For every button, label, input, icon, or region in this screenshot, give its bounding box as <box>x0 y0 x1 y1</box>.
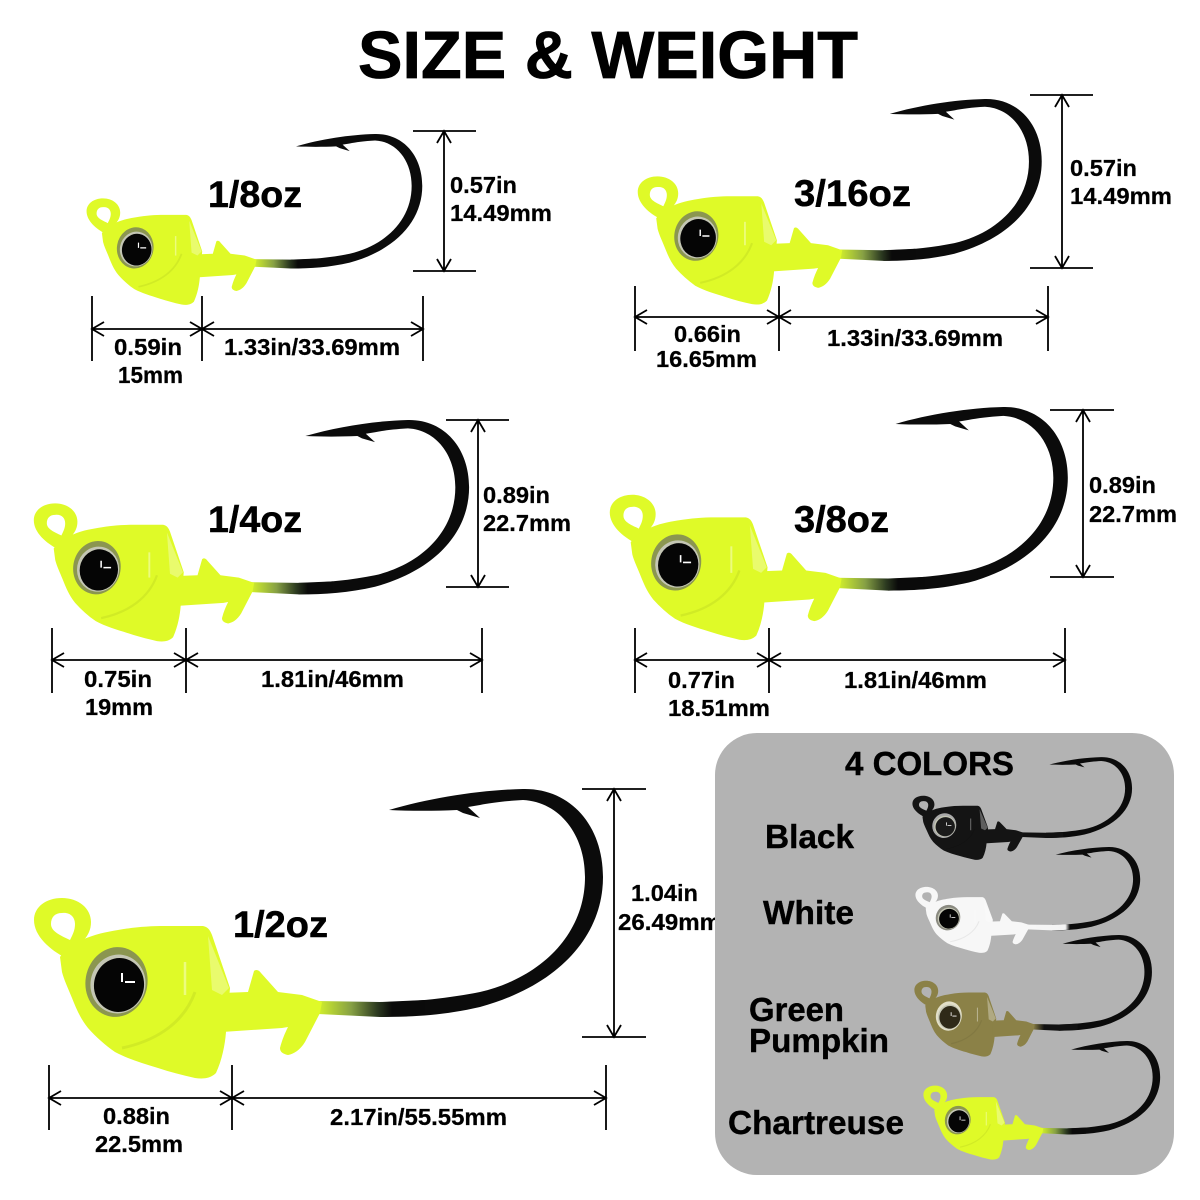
label: hook gap: 22.7mm <box>483 510 571 536</box>
dimension: head and shank length <box>635 628 1065 693</box>
jig: 1/2oz <box>34 789 603 1078</box>
panel: 3/16oz jig with dimensions <box>635 95 1172 372</box>
dimension: head and shank length <box>52 628 482 693</box>
weight label 1/8oz: 1/8oz <box>208 173 302 215</box>
weight label 3/8oz: 3/8oz <box>794 498 889 540</box>
label: hook gap: 0.89in <box>483 482 550 508</box>
heading: 4 colors: 4 COLORS <box>845 745 1014 782</box>
label: green pumpkin: Green <box>749 991 844 1028</box>
panel: 3/8oz jig with dimensions <box>610 407 1177 721</box>
jig: black <box>912 757 1132 860</box>
label: hook gap <box>618 880 721 935</box>
label: head length: 0.66in <box>674 321 741 347</box>
jig: 1/8oz <box>87 134 422 305</box>
dimension: hook gap <box>413 131 476 271</box>
label: head length: 18.51mm <box>668 695 770 721</box>
dimension: head and shank length <box>635 286 1048 351</box>
label: head length <box>114 334 183 388</box>
label: hook gap: 1.04in <box>631 880 698 906</box>
label: chartreuse: Chartreuse <box>728 1104 904 1141</box>
label: hook gap: 0.57in <box>450 172 517 198</box>
label: head length: 0.59in <box>114 334 182 360</box>
dimension: hook gap <box>582 789 646 1037</box>
label: shank length: 1.81in/46mm <box>844 667 987 693</box>
label: hook gap: 14.49mm <box>1070 183 1172 209</box>
title: SIZE & WEIGHT <box>358 19 858 93</box>
label: green pumpkin <box>749 991 889 1059</box>
label: head length: 22.5mm <box>95 1131 183 1157</box>
label: hook gap: 0.89in <box>1089 472 1156 498</box>
dimension: hook gap <box>1030 95 1093 268</box>
dimension: hook gap <box>446 420 509 587</box>
weight label 1/2oz: 1/2oz <box>233 903 328 945</box>
label: head length <box>95 1103 183 1157</box>
jig: white <box>915 847 1140 953</box>
label: head length: 0.88in <box>103 1103 170 1129</box>
label: shank length: 1.33in/33.69mm <box>827 325 1003 351</box>
label: head length: 19mm <box>85 694 153 720</box>
label: hook gap <box>1070 155 1172 209</box>
label: shank length: 2.17in/55.55mm <box>330 1104 507 1130</box>
jig: 1/4oz <box>34 420 469 641</box>
label: head length: 15mm <box>118 362 183 388</box>
dimension: head and shank length <box>49 1065 606 1130</box>
dimension: head and shank length <box>92 296 423 361</box>
label: hook gap: 26.49mm <box>618 909 721 935</box>
label: shank length: 1.33in/33.69mm <box>224 334 400 360</box>
label: head length <box>84 666 153 720</box>
jig: 3/8oz <box>610 407 1068 640</box>
label: hook gap <box>483 482 571 536</box>
jig: 3/16oz <box>638 99 1042 305</box>
label: head length: 0.75in <box>84 666 152 692</box>
jig: green pumpkin <box>914 935 1152 1057</box>
label: hook gap <box>450 172 552 226</box>
label: hook gap: 0.57in <box>1070 155 1137 181</box>
label: shank length: 1.81in/46mm <box>261 666 404 692</box>
label: hook gap: 22.7mm <box>1089 501 1177 527</box>
label: head length: 0.77in <box>668 667 735 693</box>
panel: 1/4oz jig with dimensions <box>34 420 571 720</box>
panel: 4 colors <box>715 733 1174 1175</box>
dimension: hook gap <box>1050 410 1114 577</box>
label: hook gap <box>1089 472 1177 527</box>
label: green pumpkin: Pumpkin <box>749 1022 889 1059</box>
jig: chartreuse <box>923 1041 1160 1160</box>
label: white: White <box>763 894 854 931</box>
label: head length <box>668 667 770 721</box>
label: black: Black <box>765 818 855 855</box>
panel: 1/8oz jig with dimensions <box>87 131 552 388</box>
panel background <box>715 733 1174 1175</box>
label: hook gap: 14.49mm <box>450 200 552 226</box>
panel: 1/2oz jig with dimensions <box>34 789 721 1157</box>
weight label 3/16oz: 3/16oz <box>794 172 911 214</box>
weight label 1/4oz: 1/4oz <box>208 498 302 540</box>
label: head length <box>656 321 757 372</box>
label: head length: 16.65mm <box>656 346 757 372</box>
